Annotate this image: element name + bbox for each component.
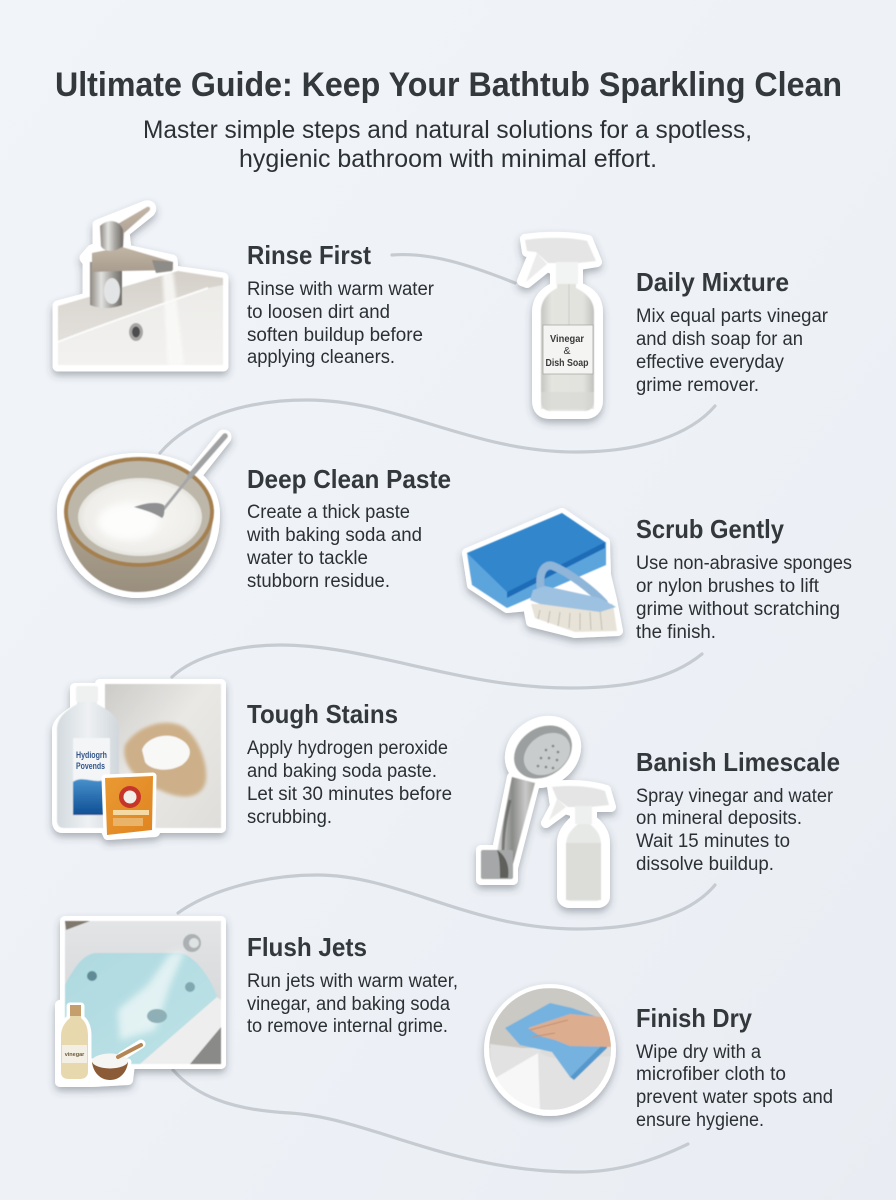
text: Flush Jets body: Run jets with warm water, bbox=[247, 971, 458, 992]
heading: Rinse First: Rinse First bbox=[247, 240, 371, 270]
icon: spray bottle bbox=[522, 237, 598, 414]
text: Tough Stains body: Let sit 30 minutes before bbox=[247, 784, 452, 805]
text: Deep Clean Paste body bbox=[246, 502, 422, 592]
text: Finish Dry body: prevent water spots and bbox=[636, 1087, 833, 1108]
text: Rinse First body bbox=[247, 279, 435, 368]
text: Tough Stains body: scrubbing. bbox=[247, 807, 332, 828]
text: Deep Clean Paste body: Create a thick paste bbox=[247, 502, 410, 523]
text: Finish Dry body: Wipe dry with a bbox=[636, 1042, 761, 1063]
text: Tough Stains body: and baking soda paste. bbox=[247, 761, 437, 782]
stain bbox=[124, 723, 206, 797]
icon: jetted tub with vinegar and baking soda bbox=[60, 921, 221, 1082]
text: Banish Limescale body bbox=[636, 786, 834, 875]
text: Daily Mixture body: effective everyday bbox=[636, 352, 784, 373]
text: Daily Mixture body: and dish soap for an bbox=[636, 329, 803, 350]
icon: shower head and spray bottle bbox=[481, 708, 611, 903]
connector curves bbox=[160, 255, 715, 1172]
icon: hydrogen peroxide, baking soda and stain: Hydiogrh bbox=[76, 750, 107, 761]
text: Rinse First body: Rinse with warm water bbox=[247, 279, 435, 300]
icon: faucet over sink bbox=[58, 206, 223, 366]
text: Daily Mixture body: grime remover. bbox=[636, 375, 759, 396]
baking soda box bbox=[105, 776, 153, 835]
heading: Flush Jets: Flush Jets bbox=[247, 932, 367, 962]
subtitle: hygienic bathroom with minimal effort. bbox=[239, 145, 657, 173]
text: Banish Limescale body: dissolve buildup. bbox=[636, 854, 774, 875]
text: Banish Limescale body: Spray vinegar and water bbox=[636, 786, 834, 807]
label: Vinegar bbox=[550, 333, 584, 345]
heading: Banish Limescale: Banish Limescale bbox=[636, 747, 840, 777]
text: Flush Jets body: to remove internal grime. bbox=[247, 1016, 448, 1037]
small spray bottle bbox=[552, 786, 609, 807]
icon: sponge and brush bbox=[467, 513, 618, 633]
vinegar bottle: vinegar bbox=[65, 1052, 85, 1058]
text: Daily Mixture body: Mix equal parts vinegar bbox=[636, 306, 829, 327]
text: Scrub Gently body: the finish. bbox=[636, 622, 716, 643]
icon: hydrogen peroxide, baking soda and stain bbox=[57, 684, 221, 835]
heading: Scrub Gently: Scrub Gently bbox=[636, 514, 784, 544]
heading: Deep Clean Paste: Deep Clean Paste bbox=[247, 464, 451, 494]
text: Rinse First body: soften buildup before bbox=[247, 325, 423, 346]
text: Finish Dry body bbox=[636, 1042, 833, 1131]
heading: Tough Stains: Tough Stains bbox=[247, 699, 398, 729]
text: Scrub Gently body bbox=[636, 553, 852, 643]
text: Scrub Gently body: grime without scratching bbox=[636, 599, 840, 620]
text: Tough Stains body bbox=[247, 738, 452, 828]
text: Finish Dry body: ensure hygiene. bbox=[636, 1110, 764, 1131]
label: & bbox=[563, 345, 571, 357]
drain bbox=[129, 323, 143, 341]
icon: hydrogen peroxide, baking soda and stain: Povends bbox=[76, 761, 105, 772]
title: Ultimate Guide: Keep Your Bathtub Sparkling Clean bbox=[55, 66, 842, 104]
bottle bbox=[57, 688, 119, 828]
text: Banish Limescale body: Wait 15 minutes to bbox=[636, 831, 790, 852]
text: Scrub Gently body: Use non-abrasive sponges bbox=[636, 553, 852, 574]
subtitle bbox=[143, 116, 752, 173]
spoon bbox=[190, 436, 225, 476]
small bowl bbox=[92, 1044, 141, 1080]
text: Deep Clean Paste body: stubborn residue. bbox=[247, 571, 390, 592]
brush bbox=[531, 604, 617, 632]
shower head bbox=[497, 777, 535, 864]
heading: Daily Mixture: Daily Mixture bbox=[636, 267, 789, 297]
text: Finish Dry body: microfiber cloth to bbox=[636, 1064, 786, 1085]
subtitle: Master simple steps and natural solutions for a spotless, bbox=[143, 116, 752, 144]
text: Tough Stains body: Apply hydrogen peroxide bbox=[247, 738, 448, 759]
text: Rinse First body: to loosen dirt and bbox=[247, 302, 390, 323]
text: Flush Jets body bbox=[247, 971, 458, 1037]
faucet bbox=[90, 262, 122, 308]
text: Banish Limescale body: on mineral deposits. bbox=[636, 808, 802, 829]
text: Flush Jets body: vinegar, and baking soda bbox=[247, 994, 450, 1015]
text: Rinse First body: applying cleaners. bbox=[247, 347, 395, 368]
text: Deep Clean Paste body: with baking soda and bbox=[246, 525, 422, 546]
vinegar bottle bbox=[61, 1005, 88, 1079]
label bbox=[543, 325, 593, 374]
icon: hand wiping with microfiber cloth bbox=[484, 984, 616, 1116]
text: Daily Mixture body bbox=[636, 306, 829, 396]
heading: Finish Dry: Finish Dry bbox=[636, 1003, 752, 1033]
icon: bowl of paste with spoon bbox=[62, 436, 225, 593]
text: Scrub Gently body: or nylon brushes to lift bbox=[636, 576, 820, 597]
text: Deep Clean Paste body: water to tackle bbox=[246, 548, 368, 569]
label: Dish Soap bbox=[546, 357, 588, 369]
